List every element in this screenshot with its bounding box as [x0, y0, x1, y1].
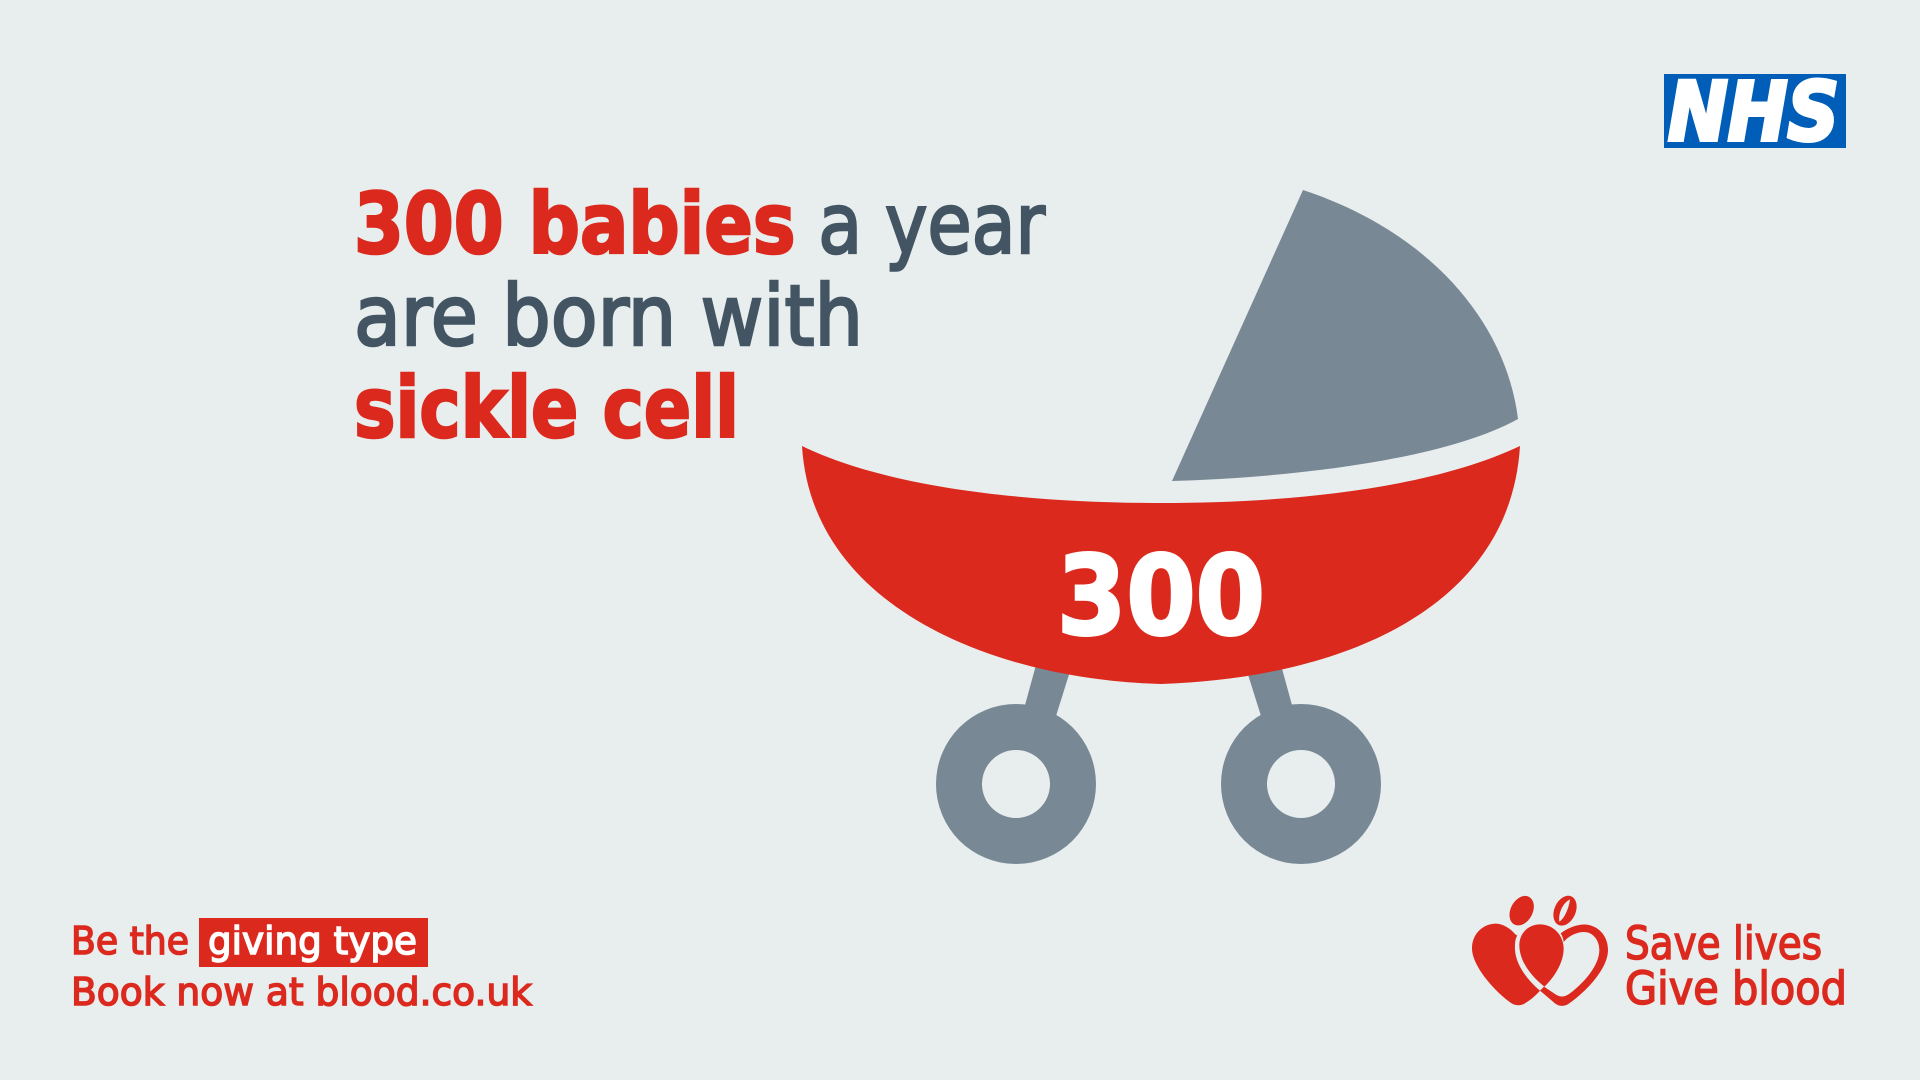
logo strapline — [1625, 917, 1847, 1015]
icon: NHS logo: NHS — [1668, 66, 1839, 160]
left wheel — [936, 704, 1096, 864]
pram basket — [802, 446, 1520, 684]
centre heart — [1519, 924, 1564, 987]
logo strapline: Give blood — [1625, 962, 1847, 1015]
campaign text — [71, 918, 532, 1014]
campaign text: Book now at blood.co.uk — [71, 970, 532, 1014]
baby head — [1505, 892, 1539, 930]
logo strapline: Save lives — [1625, 917, 1822, 970]
left heart — [1472, 924, 1540, 1005]
headline — [354, 175, 1045, 457]
adult head — [1549, 892, 1581, 929]
icon: pram — [802, 190, 1520, 864]
right wheel — [1221, 704, 1381, 864]
outline heart — [1540, 924, 1608, 1006]
left leg — [1022, 665, 1072, 716]
pram hood — [1172, 190, 1518, 481]
icon: give blood hearts logo — [1472, 892, 1608, 1006]
headline: are born with — [354, 267, 863, 365]
campaign text: Be the — [71, 919, 189, 963]
right leg — [1245, 665, 1295, 716]
pram number: 300 — [1057, 532, 1265, 660]
headline: 300 babies a year — [354, 175, 1045, 273]
giving type highlight: giving type — [208, 919, 417, 963]
headline: sickle cell — [354, 359, 739, 457]
